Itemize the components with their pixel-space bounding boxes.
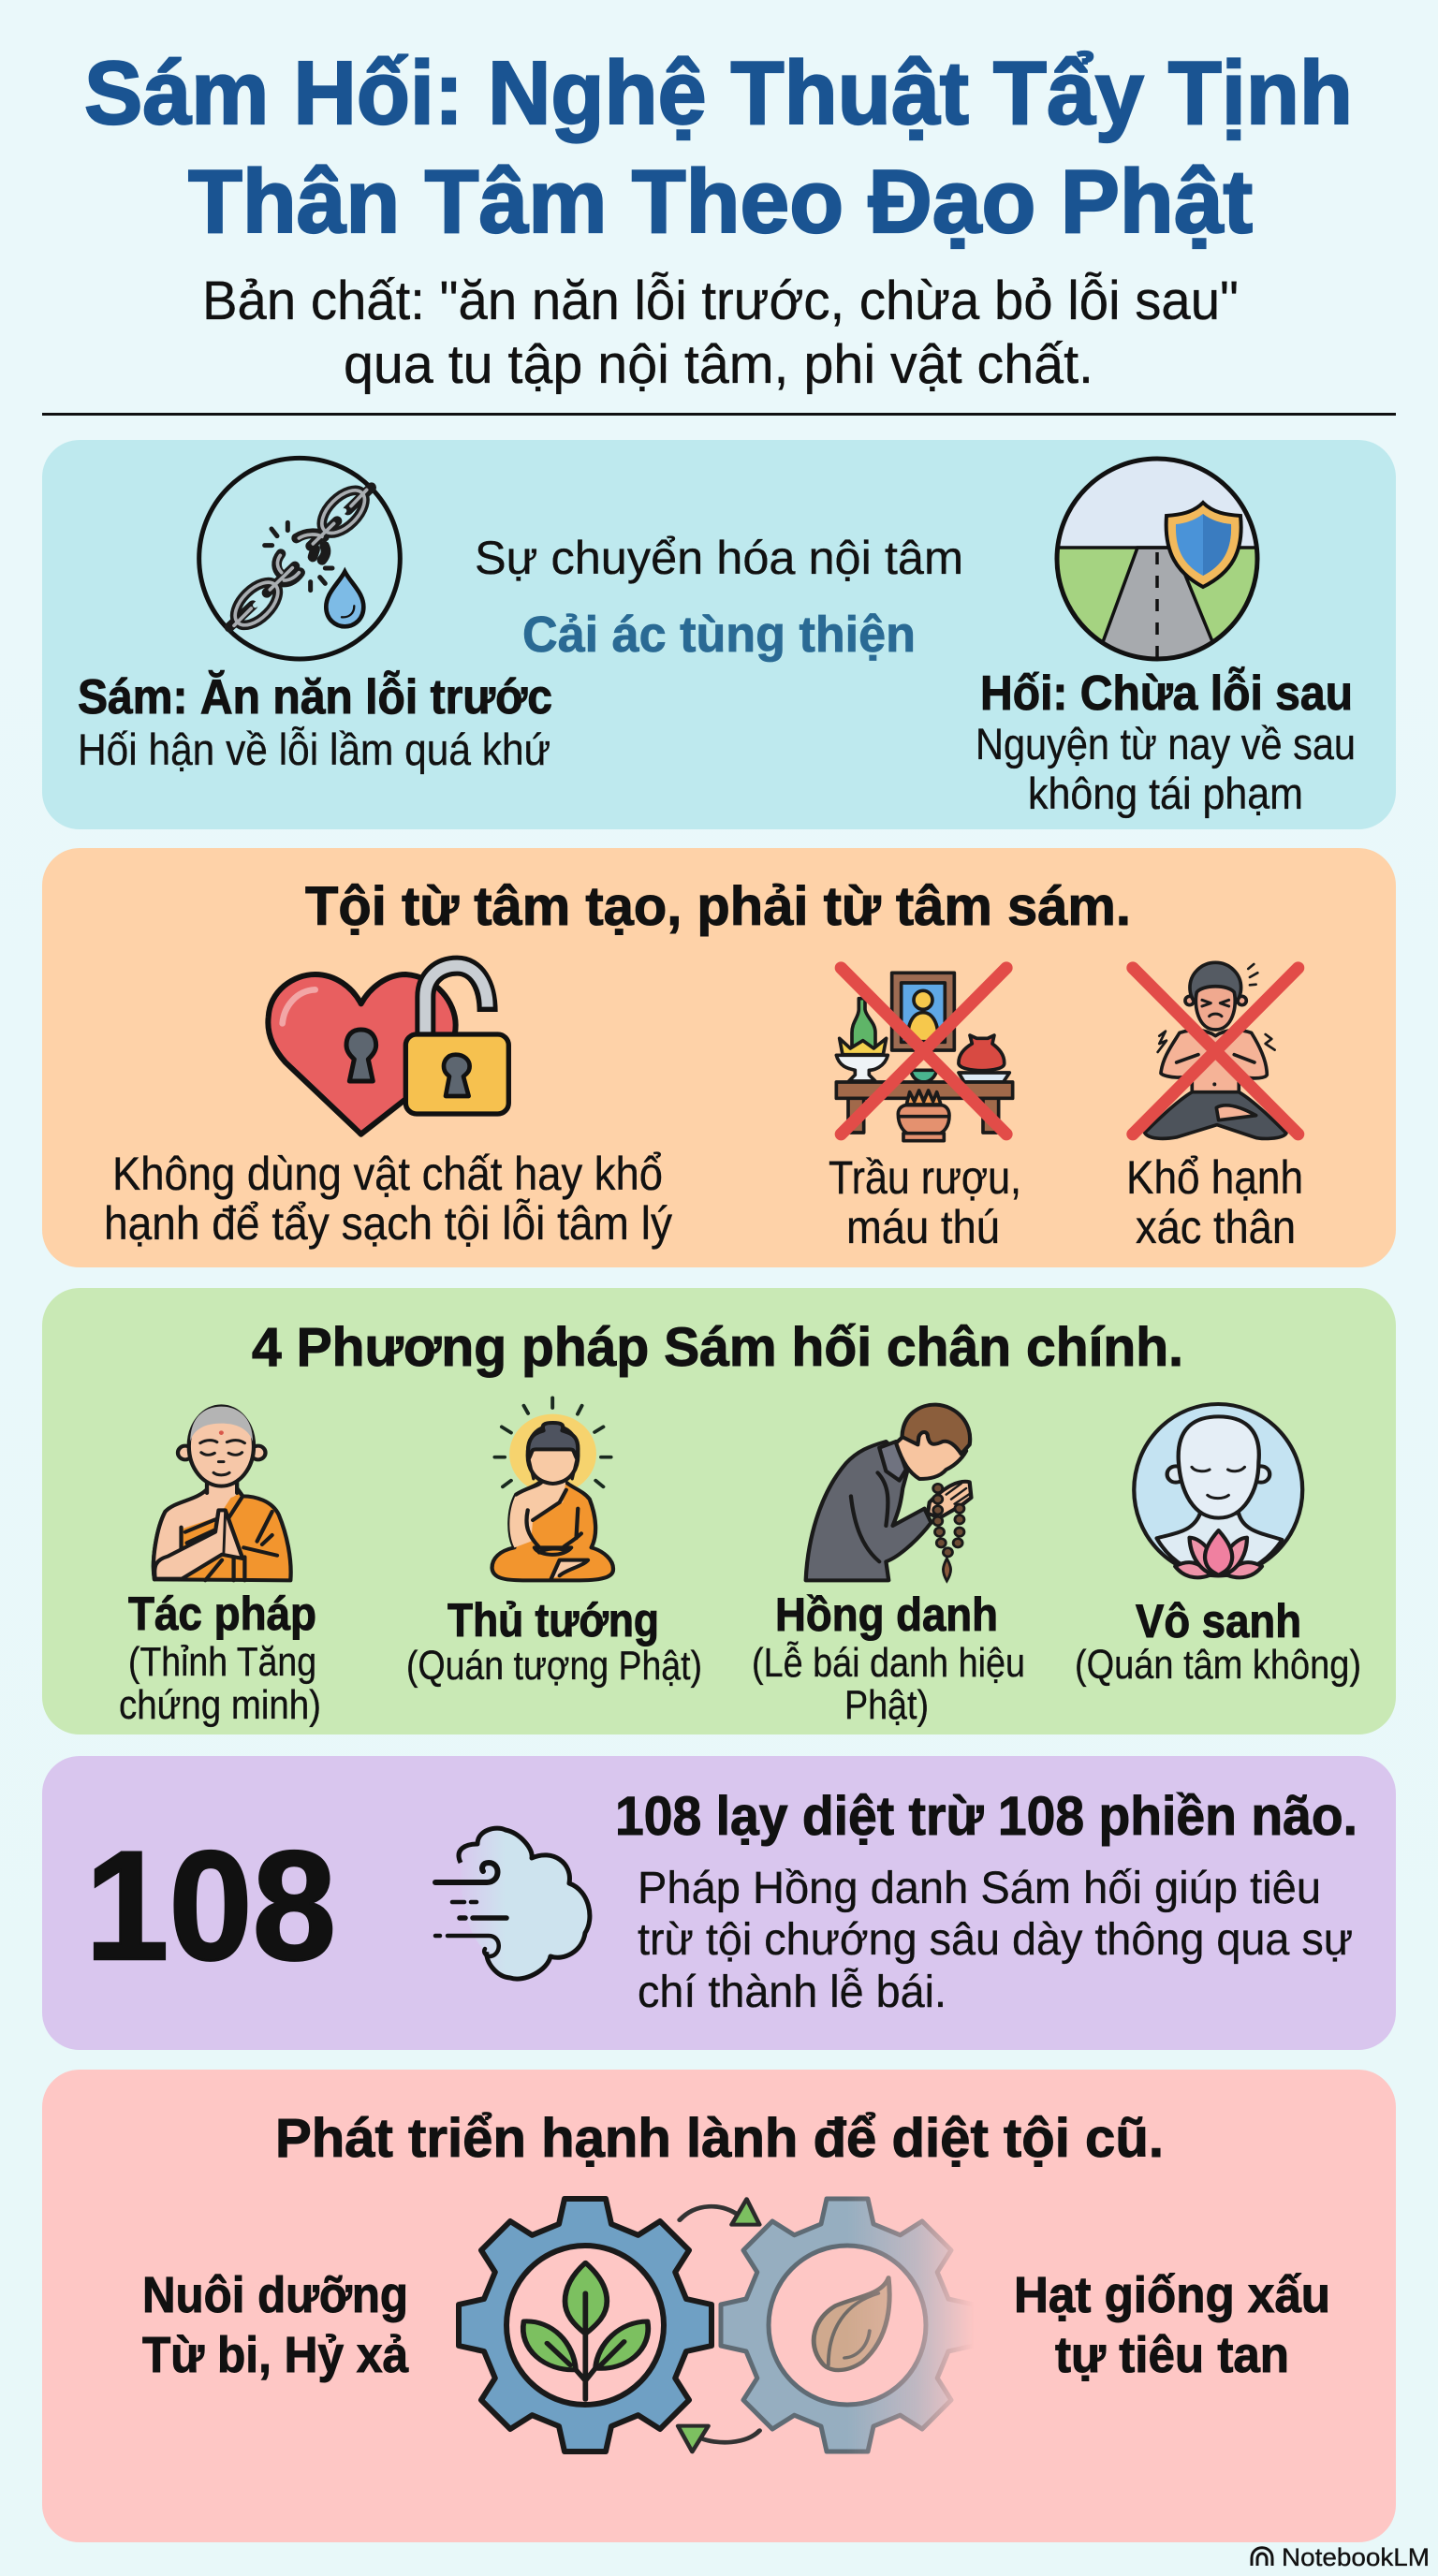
text: hạt giống xấu: Hạt giống xấu [1014, 2267, 1330, 2323]
icon: dissolving cloud with wind [435, 1828, 590, 1979]
label: trầu rượu: máu thú [846, 1201, 1000, 1253]
arrows: cycle [678, 2199, 759, 2452]
text: Hối: Nguyện từ nay về sau [976, 719, 1356, 768]
icon: Buddha meditating with halo [492, 1398, 613, 1580]
label: trầu rượu [829, 1151, 1021, 1253]
method: Thủ tướng: (Quán tượng Phật) [406, 1643, 702, 1689]
text: 108 lạy heading and body: Pháp Hồng danh Sám hối giúp tiêu [638, 1864, 1321, 1913]
icon: crossed-out ascetic [1133, 962, 1299, 1138]
label: khổ hạnh: xác thân [1136, 1201, 1296, 1253]
text: Sám: Sám: Ăn năn lỗi trước [78, 670, 552, 724]
text: hạt giống xấu [1014, 2267, 1330, 2383]
method: Tác pháp [119, 1588, 321, 1728]
text: Sám: Hối hận về lỗi lầm quá khứ [78, 724, 550, 774]
icon: man bowing with prayer beads [806, 1405, 971, 1581]
method: Tác pháp: Tác pháp [128, 1588, 316, 1640]
method: Tác pháp: chứng minh) [119, 1682, 321, 1728]
icon: monk praying [154, 1406, 291, 1580]
icon: broken chain and water drop [199, 458, 400, 659]
label: khổ hạnh [1126, 1151, 1303, 1253]
method: Hồng danh: Phật) [844, 1682, 929, 1728]
method: Thủ tướng: Thủ tướng [448, 1594, 659, 1647]
faded gear with seed [721, 2199, 974, 2452]
method: Hồng danh: Hồng danh [775, 1588, 998, 1641]
text: hạt giống xấu: tự tiêu tan [1055, 2327, 1289, 2383]
heading: Phát triển hạnh lành để diệt tội cũ. [275, 2108, 1164, 2169]
subtitle: Bản chất: "ăn năn lỗi trước, chừa bỏ lỗi sau" [202, 271, 1239, 331]
icon: heart and open padlock [268, 966, 508, 1134]
panel: phát triển hạnh lành [42, 2070, 1396, 2542]
gear with sprout [459, 2199, 712, 2452]
method: Hồng danh [752, 1588, 1025, 1728]
subtitle: qua tu tập nội tâm, phi vật chất. [344, 334, 1093, 395]
text: không dùng vật chất: Không dùng vật chất hay khổ [112, 1148, 663, 1200]
text: không dùng vật chất [104, 1148, 672, 1250]
text: 108 lạy heading and body [615, 1786, 1357, 2017]
panel: tội từ tâm [42, 848, 1396, 1267]
method: Vô sanh [1075, 1595, 1361, 1688]
icon: crossed-out offerings altar [836, 968, 1013, 1141]
center text: transformation: Sự chuyển hóa nội tâm [475, 532, 963, 584]
text: 108 lạy heading and body: trừ tội chướng sâu dày thông qua sự [638, 1915, 1353, 1965]
subtitle [202, 271, 1239, 395]
title [84, 43, 1353, 252]
text: nuôi dưỡng [142, 2267, 409, 2383]
heading: Tội từ tâm tạo, phải từ tâm sám. [305, 876, 1131, 937]
text: 108 lạy heading and body: chí thành lễ bái. [638, 1967, 946, 2017]
method: Hồng danh: (Lễ bái danh hiệu [752, 1640, 1025, 1686]
text: Sám [78, 670, 552, 774]
big number 108: 108 [85, 1820, 336, 1993]
text: nuôi dưỡng: Nuôi dưỡng [142, 2267, 408, 2323]
label: khổ hạnh: Khổ hạnh [1126, 1151, 1303, 1204]
text: không dùng vật chất: hạnh để tẩy sạch tội lỗi tâm lý [104, 1197, 672, 1250]
method: Thủ tướng [406, 1594, 702, 1689]
center text: transformation [475, 532, 963, 663]
heading: 4 Phương pháp Sám hối chân chính. [252, 1317, 1183, 1378]
text: nuôi dưỡng: Từ bi, Hỷ xả [142, 2327, 409, 2383]
footer: NotebookLM logo: NotebookLM [1282, 2543, 1430, 2571]
method: Vô sanh: (Quán tâm không) [1075, 1642, 1361, 1688]
panel: 108 lạy [42, 1756, 1396, 2050]
text: 108 lạy heading and body: 108 lạy diệt trừ 108 phiền não. [615, 1786, 1357, 1847]
text: Hối: Hối: Chừa lỗi sau [980, 666, 1353, 721]
method: Vô sanh: Vô sanh [1136, 1595, 1301, 1647]
panel: 4 phương pháp [42, 1288, 1396, 1734]
method: Tác pháp: (Thỉnh Tăng [128, 1639, 316, 1685]
center text: transformation: Cải ác tùng thiện [522, 607, 916, 663]
icon: road with shield [1056, 458, 1258, 660]
panel: Sám và Hối [42, 440, 1396, 829]
title: Thân Tâm Theo Đạo Phật [188, 152, 1253, 252]
text: Hối [976, 666, 1356, 818]
label: trầu rượu: Trầu rượu, [829, 1151, 1021, 1204]
title: Sám Hối: Nghệ Thuật Tẩy Tịnh [84, 43, 1353, 143]
icon: serene head with lotus [1134, 1404, 1302, 1577]
text: Hối: không tái phạm [1028, 768, 1303, 818]
